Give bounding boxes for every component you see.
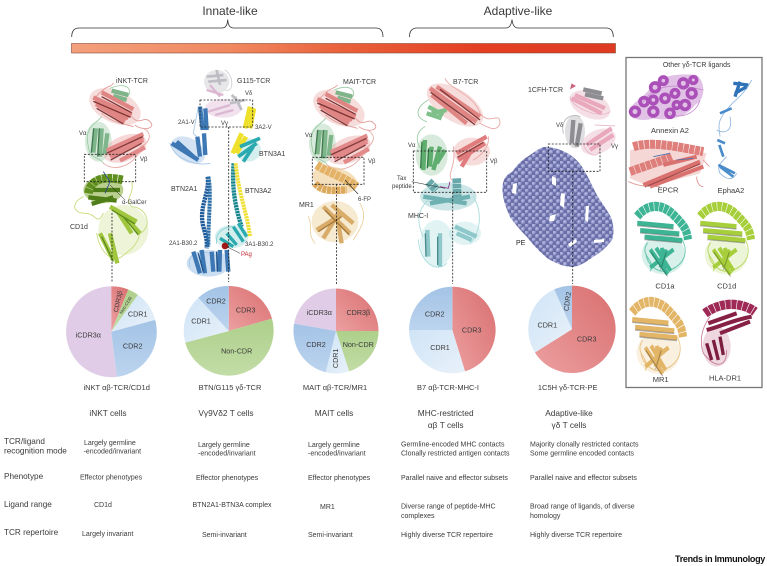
pie captions: MAIT αβ-TCR/MR1 (303, 383, 367, 392)
contact region box (548, 144, 600, 171)
pie captions: 1C5H γδ-TCR-PE (538, 383, 598, 392)
pie chart: 1C5H: CDR3 (577, 334, 596, 344)
table column headers: αβ T cells (428, 420, 464, 430)
label: 6-FP: 6-FP (358, 197, 371, 203)
label: B7-TCR: B7-TCR (453, 79, 478, 86)
label: iNKT-TCR: iNKT-TCR (116, 78, 148, 85)
table column headers: Vγ9Vδ2 T cells (198, 408, 254, 418)
column: V-gamma-9 V-delta-2 T cells: -encoded/invariant (198, 450, 256, 458)
label: CD1d: CD1d (70, 224, 88, 231)
protein ribbons: 1CFH-TCR (563, 83, 620, 160)
column: iNKT cells: -encoded/invariant (84, 448, 141, 456)
pie chart: iNKT (66, 286, 157, 377)
pie chart: MAIT: CDR2 (306, 340, 326, 349)
label: Annexin A2: Annexin A2 (651, 126, 689, 135)
pie chart: B7: CDR1 (430, 343, 450, 352)
table row labels: TCR/ligand (4, 437, 45, 446)
column: MHC-restricted T cells: complexes (401, 513, 435, 520)
pie chart: MAIT: CDR3β (346, 308, 370, 317)
column: MAIT cells: Effector phenotypes (308, 475, 371, 482)
pie chart: BTN/G115: CDR1 (191, 316, 211, 326)
journal credit: Trends in Immunology (675, 554, 765, 564)
label: Tax peptide: Tax (397, 176, 406, 182)
label: 1CFH-TCR: 1CFH-TCR (528, 87, 563, 94)
pie captions (83, 383, 598, 392)
dashed connector (572, 171, 574, 284)
pie chart: iNKT: CDR2 (123, 342, 142, 350)
column: iNKT cells: Largely germline (84, 440, 136, 447)
dashed connector (111, 213, 113, 282)
ligand: CD1a (637, 206, 688, 277)
pie chart: iNKT: Non-CDR (118, 295, 133, 315)
pie chart: B7: CDR3 (462, 326, 481, 334)
heading: Innate-like: Innate-like (202, 4, 258, 18)
label: V alpha: Vα (408, 143, 416, 149)
PE sphere model (502, 147, 614, 267)
pie chart: B7: CDR2 (425, 310, 444, 318)
pie captions: BTN/G115 γδ-TCR (199, 383, 262, 392)
ligand: CD1d (700, 206, 751, 277)
column: iNKT cells (80, 440, 143, 538)
table column headers: Adaptive-like (545, 408, 593, 418)
contact region box (413, 151, 487, 192)
label: BTN3A1: BTN3A1 (259, 151, 286, 158)
ligand: Annexin A2 (628, 74, 703, 120)
ligand: EphaA2 (717, 80, 752, 179)
column: MAIT cells: -encoded/invariant (308, 450, 366, 458)
column: V-gamma-9 V-delta-2 T cells (192, 442, 272, 539)
column: MHC-restricted T cells (401, 442, 510, 539)
bracket: adaptive-like (410, 20, 613, 37)
table column headers (89, 408, 593, 430)
structure: B7-TCR with MHC-I (392, 75, 500, 284)
ligand: HLA-DR1 (701, 304, 755, 367)
label: 2A1-B30.2: 2A1-B30.2 (169, 241, 198, 247)
pie chart: BTN/G115: CDR2 (206, 296, 226, 306)
column: iNKT cells: Effector phenotypes (80, 474, 143, 482)
pie chart: MAIT: CDR1 (331, 349, 340, 368)
label: V alpha: Vα (305, 133, 313, 139)
label: V gamma: Vγ (221, 121, 228, 127)
column: adaptive-like T cells: homology (530, 513, 561, 520)
column: adaptive-like T cells: Highly diverse TCR repertoire (530, 532, 622, 539)
label: BTN3A2: BTN3A2 (245, 188, 272, 195)
table row labels: recognition mode (4, 446, 67, 456)
pie chart: BTN/G115 (184, 286, 274, 376)
structure: MAIT-TCR with MR1 (299, 79, 376, 284)
label: EphaA2: EphaA2 (718, 186, 744, 195)
label: V alpha: Vα (79, 131, 87, 137)
column: MAIT cells: MR1 (320, 504, 335, 511)
label: Tax peptide: peptide (392, 184, 412, 190)
structure: G115-TCR with BTN2A1-BTN3A (167, 70, 286, 282)
label: PE: PE (516, 240, 526, 247)
pie chart: BTN/G115: CDR3 (236, 306, 255, 314)
label: PAg: PAg (241, 252, 252, 258)
column: MHC-restricted T cells: Clonally restricted antigen contacts (401, 450, 510, 458)
column: adaptive-like T cells: Majority clonally restricted contacts (530, 442, 639, 448)
column: V-gamma-9 V-delta-2 T cells: Largely germline (198, 442, 250, 449)
label: 3A2-V: 3A2-V (255, 125, 272, 131)
column: MHC-restricted T cells: Highly diverse TCR repertoire (401, 532, 493, 539)
label: alpha-GalCer: α-GalCer (122, 200, 146, 206)
ligand: EPCR (628, 143, 709, 187)
label: CD1a: CD1a (655, 282, 675, 290)
label: V beta: Vβ (368, 159, 376, 165)
panel: other gamma-delta TCR ligands (626, 58, 762, 388)
pie captions: B7 αβ-TCR-MHC-I (417, 383, 479, 392)
pie chart: B7 (409, 287, 496, 373)
PE internal gaps (512, 176, 604, 247)
pie chart: MAIT: iCDR3α (307, 308, 332, 317)
pointer line (345, 180, 358, 194)
pie captions: iNKT αβ-TCR/CD1d (83, 383, 150, 392)
column: MAIT cells: Semi-invariant (308, 532, 353, 539)
table row labels: Ligand range (4, 500, 52, 509)
label: 3A1-B30.2: 3A1-B30.2 (245, 242, 274, 248)
gradient spectrum bar (72, 44, 616, 53)
pie chart: 1C5H: CDR2 (562, 291, 573, 312)
table column headers: MHC-restricted (418, 408, 474, 418)
label: V gamma: Vγ (611, 144, 618, 150)
pie chart: BTN/G115: Non-CDR (221, 346, 252, 356)
pie chart: 1C5H (528, 286, 616, 373)
dashed connector (336, 184, 338, 284)
structure: 1CFH-TCR with PE (502, 83, 620, 284)
label: MAIT-TCR: MAIT-TCR (343, 79, 376, 86)
column: MAIT cells (308, 442, 371, 539)
heading: Adaptive-like: Adaptive-like (484, 4, 553, 18)
label: V delta: Vδ (245, 91, 253, 97)
column: V-gamma-9 V-delta-2 T cells: BTN2A1-BTN3A complex (192, 502, 272, 509)
contact region box (84, 154, 136, 182)
table column headers: iNKT cells (89, 408, 127, 418)
pie chart: iNKT: iCDR3α (76, 330, 101, 340)
protein ribbons: MAIT-TCR and MR1 (307, 82, 376, 243)
table row labels: TCR repertoire (4, 528, 59, 537)
pie chart: iNKT: CDR1 (128, 310, 147, 318)
column: MHC-restricted T cells: Diverse range of peptide-MHC (401, 504, 496, 510)
column: MHC-restricted T cells: Germline-encoded MHC contacts (401, 442, 504, 448)
label: V beta: Vβ (490, 159, 498, 165)
pie chart: iNKT: CDR3β (113, 290, 124, 313)
label: V beta: Vβ (140, 157, 148, 163)
column: MAIT cells: Largely germline (308, 442, 360, 449)
table column headers: γδ T cells (552, 420, 586, 430)
pie chart: 1C5H: CDR1 (538, 320, 557, 330)
label: MR1: MR1 (653, 375, 669, 384)
contact region box (200, 100, 253, 127)
label: 2A1-V: 2A1-V (178, 120, 195, 126)
ligand: MR1 (632, 302, 683, 376)
column: adaptive-like T cells: Broad range of ligands, of diverse (530, 504, 635, 510)
protein ribbons: BTN complex (167, 70, 261, 277)
pie chart: MAIT (293, 288, 378, 373)
table row labels: Phenotype (4, 472, 44, 481)
bracket: innate-like (72, 20, 383, 37)
label: MR1: MR1 (299, 202, 314, 209)
label: EPCR: EPCR (658, 186, 679, 194)
structure: iNKT-TCR with CD1d (70, 78, 152, 282)
column: adaptive-like T cells (530, 442, 639, 539)
pie chart: MAIT: Non-CDR (343, 340, 374, 349)
dashed connector (452, 192, 454, 284)
label: G115-TCR: G115-TCR (237, 78, 270, 85)
column: V-gamma-9 V-delta-2 T cells: Semi-invariant (202, 532, 247, 539)
column: iNKT cells: Largely invariant (82, 531, 133, 538)
dashed connector (228, 127, 230, 282)
column: adaptive-like T cells: Parallel naive and effector subsets (530, 475, 637, 482)
label: MHC-I: MHC-I (408, 213, 428, 220)
table column headers: MAIT cells (315, 408, 353, 418)
column: iNKT cells: CD1d (94, 502, 112, 509)
contact region box (312, 157, 364, 184)
protein ribbons: B7-TCR and MHC-I (412, 75, 500, 267)
column: MHC-restricted T cells: Parallel naive and effector subsets (401, 475, 508, 482)
protein ribbons: iNKT-TCR and CD1d (75, 81, 152, 263)
label: BTN2A1: BTN2A1 (171, 186, 198, 193)
table row labels (4, 437, 67, 537)
column: adaptive-like T cells: Some germline encoded contacts (530, 450, 634, 458)
label: V delta: Vδ (556, 123, 564, 129)
column: V-gamma-9 V-delta-2 T cells: Effector phenotypes (196, 475, 259, 482)
label: CD1d: CD1d (717, 282, 736, 290)
label: HLA-DR1: HLA-DR1 (709, 374, 741, 382)
panel title: Other γδ-TCR ligands (663, 62, 731, 69)
